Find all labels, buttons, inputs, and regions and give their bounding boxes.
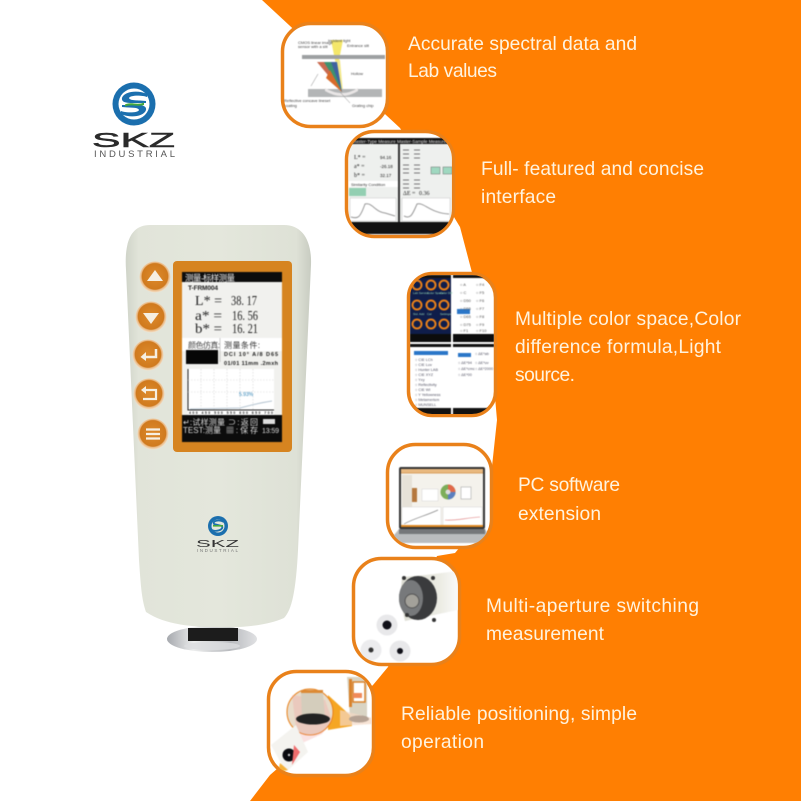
text: interface bbox=[481, 159, 704, 208]
device body bbox=[126, 225, 311, 627]
text: apertures bbox=[486, 596, 699, 645]
button enter bbox=[132, 340, 164, 370]
menu screens: ○ Yxy bbox=[415, 378, 425, 382]
text: interface: interface bbox=[481, 187, 556, 208]
menu screens: ○ ΔE*uv bbox=[475, 361, 489, 365]
optical head and aperture caps bbox=[360, 571, 458, 662]
Lab readings: a* = bbox=[195, 309, 222, 324]
menu screens: ○ D50 bbox=[460, 298, 472, 303]
device screen: 13:59 bbox=[262, 428, 279, 435]
instrument screens: 32.17 bbox=[380, 173, 392, 178]
text: color spaces: source. bbox=[515, 365, 575, 386]
device buttons bbox=[132, 262, 170, 450]
text: positioning bbox=[401, 704, 637, 753]
panel: PC software bbox=[388, 444, 492, 548]
measurement conditions: DCI 10° A/8 D65 bbox=[224, 352, 278, 358]
text: color spaces bbox=[515, 309, 742, 386]
device: colorimeter bbox=[126, 225, 311, 652]
menu screens: Std. Add bbox=[413, 312, 425, 316]
device screen: 颜色仿真: bbox=[188, 340, 220, 350]
optical diagram: Hollow bbox=[351, 71, 363, 76]
Lab readings: L* = bbox=[195, 294, 222, 309]
menu screens: ○ F10 bbox=[476, 328, 487, 333]
instrument screens: Similarity Condition bbox=[351, 182, 385, 187]
menu screens: Cal bbox=[427, 312, 432, 316]
panel: positioning bbox=[268, 672, 374, 776]
menu screens: ○ ΔE*2000 bbox=[475, 367, 493, 371]
menu screens: Settings bbox=[440, 312, 451, 316]
Lab readings bbox=[195, 294, 258, 337]
text: apertures: measurement bbox=[486, 624, 605, 645]
Lab readings: 16. 56 bbox=[232, 309, 258, 324]
device logo: INDUSTRIAL bbox=[197, 548, 238, 553]
menu screens: ○ F9 bbox=[476, 322, 485, 327]
menu screens: ○ ΔE*cmc bbox=[458, 367, 475, 371]
menu screens: ○ CIE WI bbox=[415, 388, 430, 392]
button back bbox=[134, 378, 164, 410]
menu screens: ○ CIE LCh bbox=[415, 358, 433, 362]
instrument screens: 94.16 bbox=[380, 155, 392, 160]
device screen: 01/01 11mm .2mxh bbox=[224, 361, 279, 367]
device screen: ⊃:返回 bbox=[228, 418, 258, 427]
screen title bar bbox=[182, 272, 282, 282]
text: interface: Full- featured and concise bbox=[481, 159, 704, 180]
icon: logo globe bbox=[112, 82, 156, 126]
color wheel bbox=[440, 484, 456, 500]
logo: SKZ Industrial bbox=[92, 82, 175, 160]
text: color spaces: Multiple color space,Color bbox=[515, 309, 742, 330]
sample id: T-FRM004 bbox=[188, 285, 218, 292]
instrument screens: L* = bbox=[354, 155, 366, 161]
menu screens: ○ MUNSELL bbox=[415, 403, 436, 407]
text: positioning: Reliable positioning, simple bbox=[401, 704, 637, 725]
spectral chart bbox=[188, 369, 274, 419]
menu screens: ○ Hunter LAB bbox=[415, 368, 438, 372]
device screen bbox=[182, 272, 282, 442]
menu screens: ○ F6 bbox=[476, 298, 485, 303]
menu screens: Color Space bbox=[427, 291, 444, 295]
instrument screens: b* = bbox=[354, 173, 366, 179]
menu screens: ○ ΔE*00 bbox=[458, 373, 472, 377]
Lab readings: 38. 17 bbox=[231, 294, 257, 309]
panel: apertures bbox=[354, 558, 460, 664]
menu screens: ○ F7 bbox=[476, 306, 485, 311]
text: apertures: Multi-aperture switching bbox=[486, 596, 699, 617]
menu screens: ○ Metamerism bbox=[415, 398, 439, 402]
device logo: SKZ bbox=[196, 539, 239, 550]
screen footer bbox=[182, 415, 282, 442]
Lab readings: b* = bbox=[195, 322, 222, 337]
device screen: ↵:试样测量 bbox=[183, 417, 225, 427]
logo subtitle: INDUSTRIAL bbox=[94, 149, 175, 160]
instrument screens: 0.36 bbox=[419, 191, 430, 197]
menu screens: ○ D65 bbox=[460, 314, 472, 319]
menu screens: ○ CIE Luv bbox=[415, 363, 432, 367]
text: spectral data bbox=[408, 34, 637, 82]
Lab readings: 16. 21 bbox=[232, 322, 258, 337]
menu screens: ○ ΔE*ab bbox=[475, 352, 489, 356]
text: PC software: PC software bbox=[518, 475, 620, 496]
orange background shape bbox=[250, 0, 801, 801]
button menu bbox=[138, 418, 168, 450]
instrument screens bbox=[349, 138, 452, 234]
optical diagram: Grating chip bbox=[352, 103, 374, 108]
menu screens: ○ F1 bbox=[460, 328, 469, 333]
device screen: TEST:测量 bbox=[183, 426, 221, 435]
menu screens: Lab Service bbox=[413, 291, 429, 295]
menu screens bbox=[410, 275, 494, 416]
panel: color spaces bbox=[408, 274, 496, 416]
panel: interface bbox=[346, 132, 454, 236]
menu screens: ○ D75 bbox=[460, 322, 472, 327]
instrument screens: ΔE = bbox=[403, 191, 416, 197]
device measuring base bbox=[167, 626, 257, 652]
device screen: ▦:保存 bbox=[226, 425, 258, 435]
spectral chart: 5.93% bbox=[239, 392, 254, 398]
button up bbox=[140, 262, 170, 292]
text: color spaces: difference formula,Light bbox=[515, 337, 722, 358]
menu screens: ○ F4 bbox=[476, 282, 485, 287]
text: PC software bbox=[518, 475, 620, 525]
device screen: 测量-标样测量 bbox=[185, 273, 235, 283]
text: spectral data: Accurate spectral data and bbox=[408, 34, 637, 55]
spectral chart: 400 450 500 550 600 650 700 bbox=[189, 411, 273, 415]
optical diagram: Reflective concave lineset bbox=[284, 98, 331, 103]
device logo bbox=[196, 516, 239, 553]
text: spectral data: Lab values bbox=[408, 61, 497, 82]
menu screens: ○ ΔE*94 bbox=[458, 361, 472, 365]
menu screens: ○ C bbox=[460, 290, 467, 295]
text: PC software: extension bbox=[518, 504, 601, 525]
instrument screens: a* = bbox=[354, 164, 365, 170]
black color swatch bbox=[186, 350, 218, 364]
logo wordmark: SKZ bbox=[92, 129, 175, 152]
instrument screens: Master-Type Measure Master-Sample Measure bbox=[352, 139, 447, 144]
menu screens: ○ Y Yellowness bbox=[415, 393, 441, 397]
optical diagram: coating bbox=[284, 103, 297, 108]
menu screens: ○ D55 bbox=[460, 306, 472, 311]
optical diagram: Entrance slit bbox=[347, 43, 370, 48]
sim and condition labels bbox=[182, 338, 282, 351]
button down bbox=[136, 302, 166, 332]
menu screens: ○ F5 bbox=[476, 290, 485, 295]
panel: spectral diagram bbox=[282, 24, 388, 126]
text: positioning: operation bbox=[401, 732, 484, 753]
menu screens: ○ A bbox=[460, 282, 466, 287]
menu screens: Color Diff bbox=[440, 291, 453, 295]
device screen bezel bbox=[173, 261, 292, 452]
menu screens: ○ Reflectivity bbox=[415, 383, 437, 387]
menu screens: ○ F8 bbox=[476, 314, 485, 319]
laptop bbox=[390, 467, 492, 543]
menu screens: ○ CIE XYZ bbox=[415, 373, 434, 377]
device screen: 测量条件: bbox=[224, 340, 260, 350]
usage photo bbox=[271, 677, 372, 772]
optical diagram bbox=[284, 38, 385, 108]
instrument screens: -26.18 bbox=[380, 164, 393, 169]
optical diagram: CMOS linear image bbox=[298, 40, 334, 45]
optical diagram: sensor with a slit bbox=[298, 44, 328, 49]
optical diagram: Incident light bbox=[328, 38, 351, 43]
